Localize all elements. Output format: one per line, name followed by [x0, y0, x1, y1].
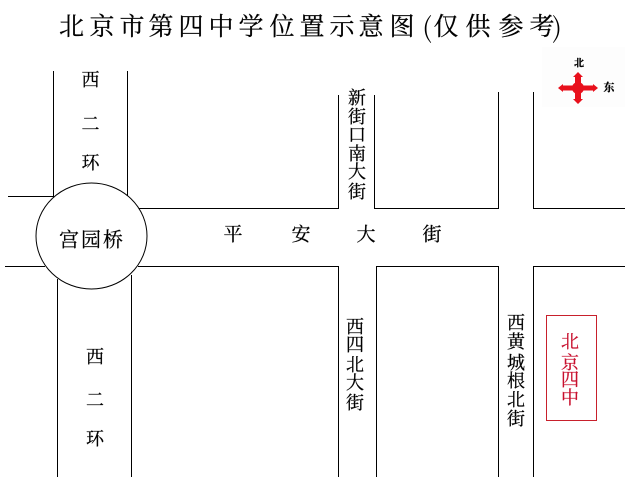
compass — [542, 47, 625, 107]
label: west second ring north: 西二环 — [82, 66, 100, 175]
school marker: beijing no. 4 high school — [546, 316, 596, 420]
road: xinjiekou south street edges — [138, 92, 625, 208]
title: ) — [552, 6, 562, 44]
label: ping'an avenue: 平安大街 — [223, 220, 442, 246]
label: north: 北 — [574, 54, 584, 70]
label: east: 东 — [604, 79, 616, 95]
road: west second ring north — [8, 71, 128, 196]
label: west second ring south: 西二环 — [86, 343, 105, 451]
road: west second ring south — [58, 275, 132, 477]
label: xihuangchenggen north street: 西黄城根北街 — [507, 309, 526, 431]
title: 北京市第四中学位置示意图 — [59, 7, 415, 43]
title: 仅供参考 — [433, 7, 555, 43]
label: xisi north street: 西四北大街 — [346, 313, 364, 415]
roundabout: guanyuan bridge — [36, 183, 147, 289]
title: ( — [422, 6, 432, 44]
roundabout: guanyuan bridge: 宫园桥 — [59, 224, 123, 252]
icon: red compass cross — [558, 72, 598, 104]
school marker: beijing no. 4 high school: 北京四中 — [561, 328, 579, 410]
road: ping'an avenue south edges — [5, 266, 625, 477]
label: xinjiekou south street: 新街口南大街 — [348, 84, 366, 204]
